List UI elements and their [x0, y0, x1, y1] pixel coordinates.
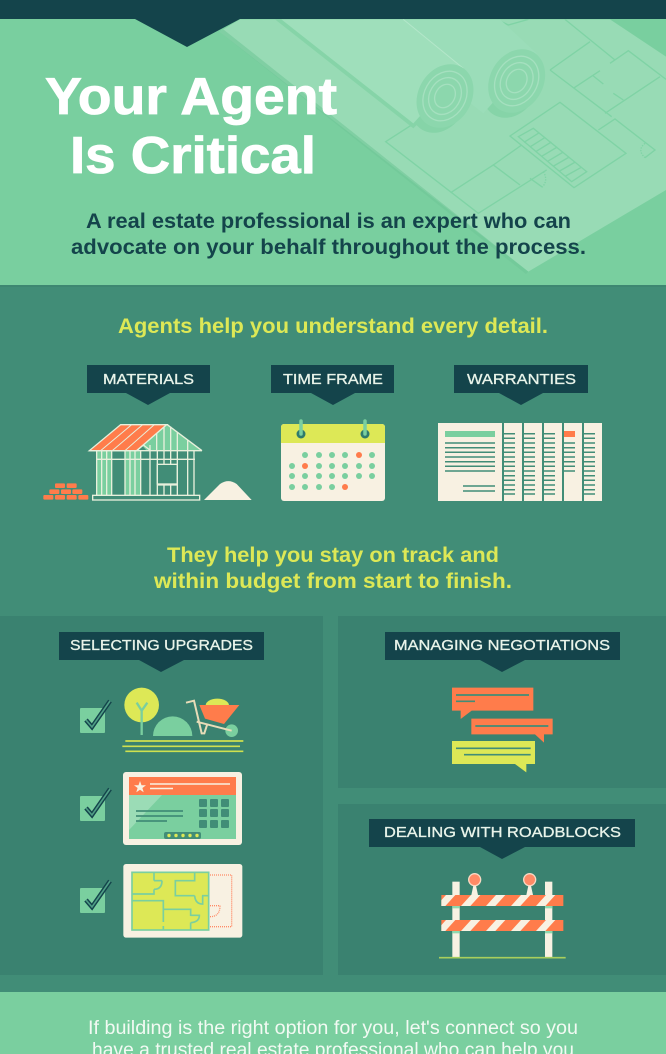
- panel: closing message: [0, 992, 666, 1054]
- icon: calendar: [281, 421, 385, 501]
- roll one: [275, 19, 420, 128]
- closing text: If building is the right option for you, let's connect so you: [88, 1018, 578, 1039]
- heading: understand every detail: Agents help you understand every detail.: [118, 315, 548, 338]
- panel: managing negotiations: [338, 616, 666, 788]
- label: warranties: [454, 365, 588, 405]
- wall fills: [97, 451, 112, 495]
- icon: floor plan card: [123, 864, 242, 938]
- panel: details section background: [0, 285, 666, 992]
- label: dealing with roadblocks: DEALING WITH ROADBLOCKS: [384, 824, 621, 841]
- title: Is Critical: [70, 127, 316, 185]
- icon: road barricade: [436, 874, 566, 958]
- heading: on track and within budget: [153, 544, 512, 593]
- gable: [142, 425, 202, 451]
- illustration: blueprint with rolled plans: [219, 19, 666, 274]
- label: managing negotiations: MANAGING NEGOTIATIONS: [394, 637, 610, 654]
- panel: hero header: [0, 0, 666, 285]
- label: managing negotiations: [385, 632, 620, 672]
- label: selecting upgrades: [59, 632, 264, 672]
- heading: on track and within budget: within budget from start to finish.: [153, 570, 512, 593]
- label: materials: [87, 365, 210, 405]
- top bar with notch: [0, 0, 666, 47]
- label: materials: MATERIALS: [103, 371, 194, 388]
- intro text: [71, 210, 586, 259]
- closing text: [88, 1018, 578, 1054]
- icon: chat bubbles: [452, 688, 553, 772]
- label: dealing with roadblocks: [369, 819, 635, 859]
- icon: landscaping: [122, 688, 243, 751]
- panel: dealing with roadblocks: [338, 804, 666, 975]
- sand pile: [204, 481, 252, 500]
- label: time frame: TIME FRAME: [283, 371, 383, 388]
- label: warranties: WARRANTIES: [467, 371, 576, 388]
- checkbox two: [80, 789, 110, 821]
- icon: warranty documents: [438, 423, 602, 501]
- panel: selecting upgrades: [0, 616, 323, 975]
- roll two: [471, 44, 550, 128]
- icon: tablet with options: [123, 772, 242, 845]
- intro text: A real estate professional is an expert who can: [86, 210, 571, 233]
- checkbox one: [80, 701, 110, 733]
- heading: on track and within budget: They help you stay on track and: [167, 544, 499, 567]
- title: [45, 68, 337, 185]
- bricks: [43, 483, 88, 500]
- label: time frame: [271, 365, 394, 405]
- checkbox three: [80, 881, 110, 913]
- label: selecting upgrades: SELECTING UPGRADES: [70, 637, 253, 654]
- icon: house under construction: [43, 425, 252, 500]
- roof: [89, 425, 167, 451]
- intro text: advocate on your behalf throughout the process.: [71, 236, 586, 259]
- title: Your Agent: [45, 68, 337, 126]
